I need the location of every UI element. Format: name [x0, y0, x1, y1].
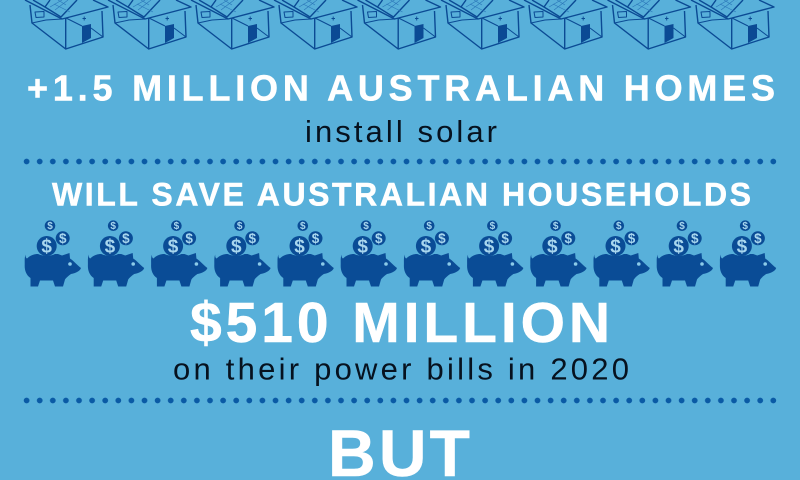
heading: households: WILL SAVE AUSTRALIAN HOUSEHOLDS [52, 176, 751, 212]
heading: savings amount: $510 MILLION [190, 291, 610, 355]
text: install solar: install solar [305, 114, 497, 149]
dotted divider [20, 394, 780, 407]
text: power bills: on their power bills in 2020 [173, 352, 629, 386]
row of piggy bank icons [25, 220, 776, 286]
dotted divider [20, 155, 780, 168]
row of solar house icons [25, 0, 774, 49]
heading: homes: +1.5 MILLION AUSTRALIAN HOMES [27, 68, 775, 108]
